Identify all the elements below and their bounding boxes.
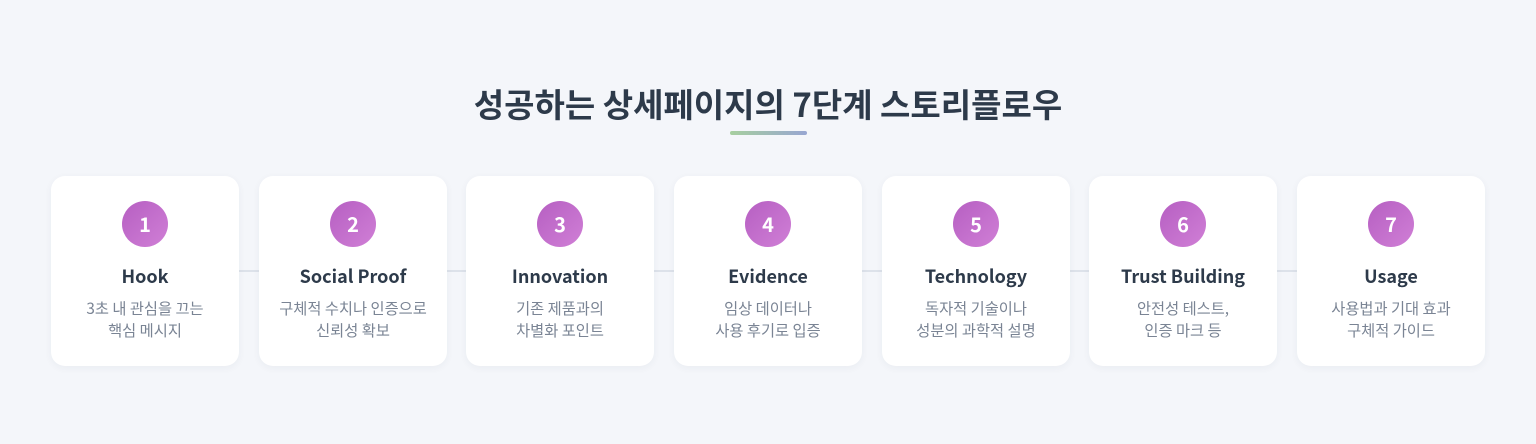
panel: step 7: Usage	[1364, 263, 1418, 289]
panel: step 2	[259, 176, 447, 366]
panel: step 5: 독자적 기술이나	[925, 297, 1027, 319]
panel: step 1: 3초 내 관심을 끄는	[86, 297, 204, 319]
panel: step 2: 2	[347, 209, 359, 238]
panel: step 3: 기존 제품과의	[516, 297, 604, 319]
panel: step 5	[882, 176, 1070, 366]
panel: step 3: Innovation	[512, 263, 608, 289]
panel: step 4: Evidence	[728, 263, 808, 289]
panel: step 3: 3	[554, 209, 566, 238]
arrow 2-3	[446, 270, 466, 272]
panel: step 6: 안전성 테스트,	[1137, 297, 1229, 319]
panel: step 4: 사용 후기로 입증	[715, 319, 821, 341]
arrow 3-4	[654, 270, 674, 272]
panel: step 6: 인증 마크 등	[1144, 319, 1222, 341]
panel: step 3	[466, 176, 654, 366]
panel: step 5: 성분의 과학적 설명	[916, 319, 1036, 341]
arrow 6-7	[1277, 270, 1297, 272]
arrow 4-5	[862, 270, 882, 272]
arrow 5-6	[1069, 270, 1089, 272]
panel: step 1	[51, 176, 239, 366]
panel: step 6: Trust Building	[1121, 263, 1245, 289]
panel: step 2: Social Proof	[300, 263, 406, 289]
panel: step 2: 구체적 수치나 인증으로	[279, 297, 427, 319]
panel: step 3: 차별화 포인트	[516, 319, 604, 341]
title: 성공하는 상세페이지의 7단계 스토리플로우	[474, 79, 1062, 127]
panel: step 5: Technology	[925, 263, 1027, 289]
panel: step 7: 사용법과 기대 효과	[1331, 297, 1451, 319]
panel: step 6: 6	[1177, 209, 1189, 238]
arrow 1-2	[239, 270, 259, 272]
panel: step 7: 구체적 가이드	[1347, 319, 1435, 341]
panel: step 4: 4	[762, 209, 774, 238]
panel: step 4: 임상 데이터나	[724, 297, 812, 319]
panel: step 7: 7	[1385, 209, 1397, 238]
panel: step 2: 신뢰성 확보	[316, 319, 390, 341]
panel: step 6	[1089, 176, 1277, 366]
panel: step 1: 1	[139, 209, 151, 238]
panel: step 5: 5	[970, 209, 982, 238]
panel: step 1: 핵심 메시지	[108, 319, 182, 341]
panel: step 7	[1297, 176, 1485, 366]
title underline	[730, 131, 807, 135]
panel: step 1: Hook	[121, 263, 169, 289]
panel: step 4	[674, 176, 862, 366]
